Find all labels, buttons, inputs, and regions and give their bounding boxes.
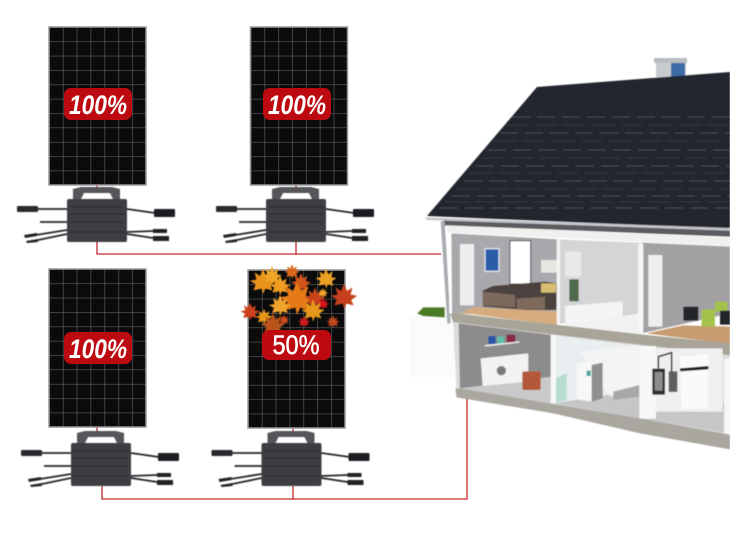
heat pump unit [577,345,640,402]
wall divider [551,335,556,403]
solar panel 1 [49,27,146,185]
grass [417,307,445,317]
solar panel 3 [49,269,146,427]
badge 100% panel 2: 100% [268,90,326,120]
autumn leaves [241,264,357,336]
outer wall edge [448,233,452,313]
basket [522,371,541,390]
background haze behind house [410,316,455,377]
control boxes [652,353,677,395]
red wiring: lower string [97,398,467,499]
solar panel 2 [250,27,348,185]
roof [427,72,730,229]
microinverter 3 [21,431,179,487]
basement [453,322,730,449]
red wiring: upper string [97,185,441,254]
dining set [683,307,698,321]
microinverter 2 [216,187,374,243]
badge 50%: 50% [272,330,320,360]
house interior, drawn at 3x [417,217,730,449]
washing machine [481,353,528,386]
storage tank [680,354,708,409]
floor slab [450,313,730,355]
basement floor edge [455,388,730,449]
house cutaway [417,58,730,449]
bathroom [557,239,560,325]
badge 100% panel 1: 100% [69,90,127,120]
microinverter 4 [212,431,370,487]
solar panel 4 shaded [241,264,357,428]
sofa [483,282,557,310]
chimney [654,58,687,78]
upper floor [451,233,730,344]
shelf with bottles [485,335,519,347]
window and curtain [510,241,531,284]
badge 100% panel 3: 100% [69,334,127,364]
microinverter 1 [17,187,175,243]
gutter and fascia [425,217,730,323]
